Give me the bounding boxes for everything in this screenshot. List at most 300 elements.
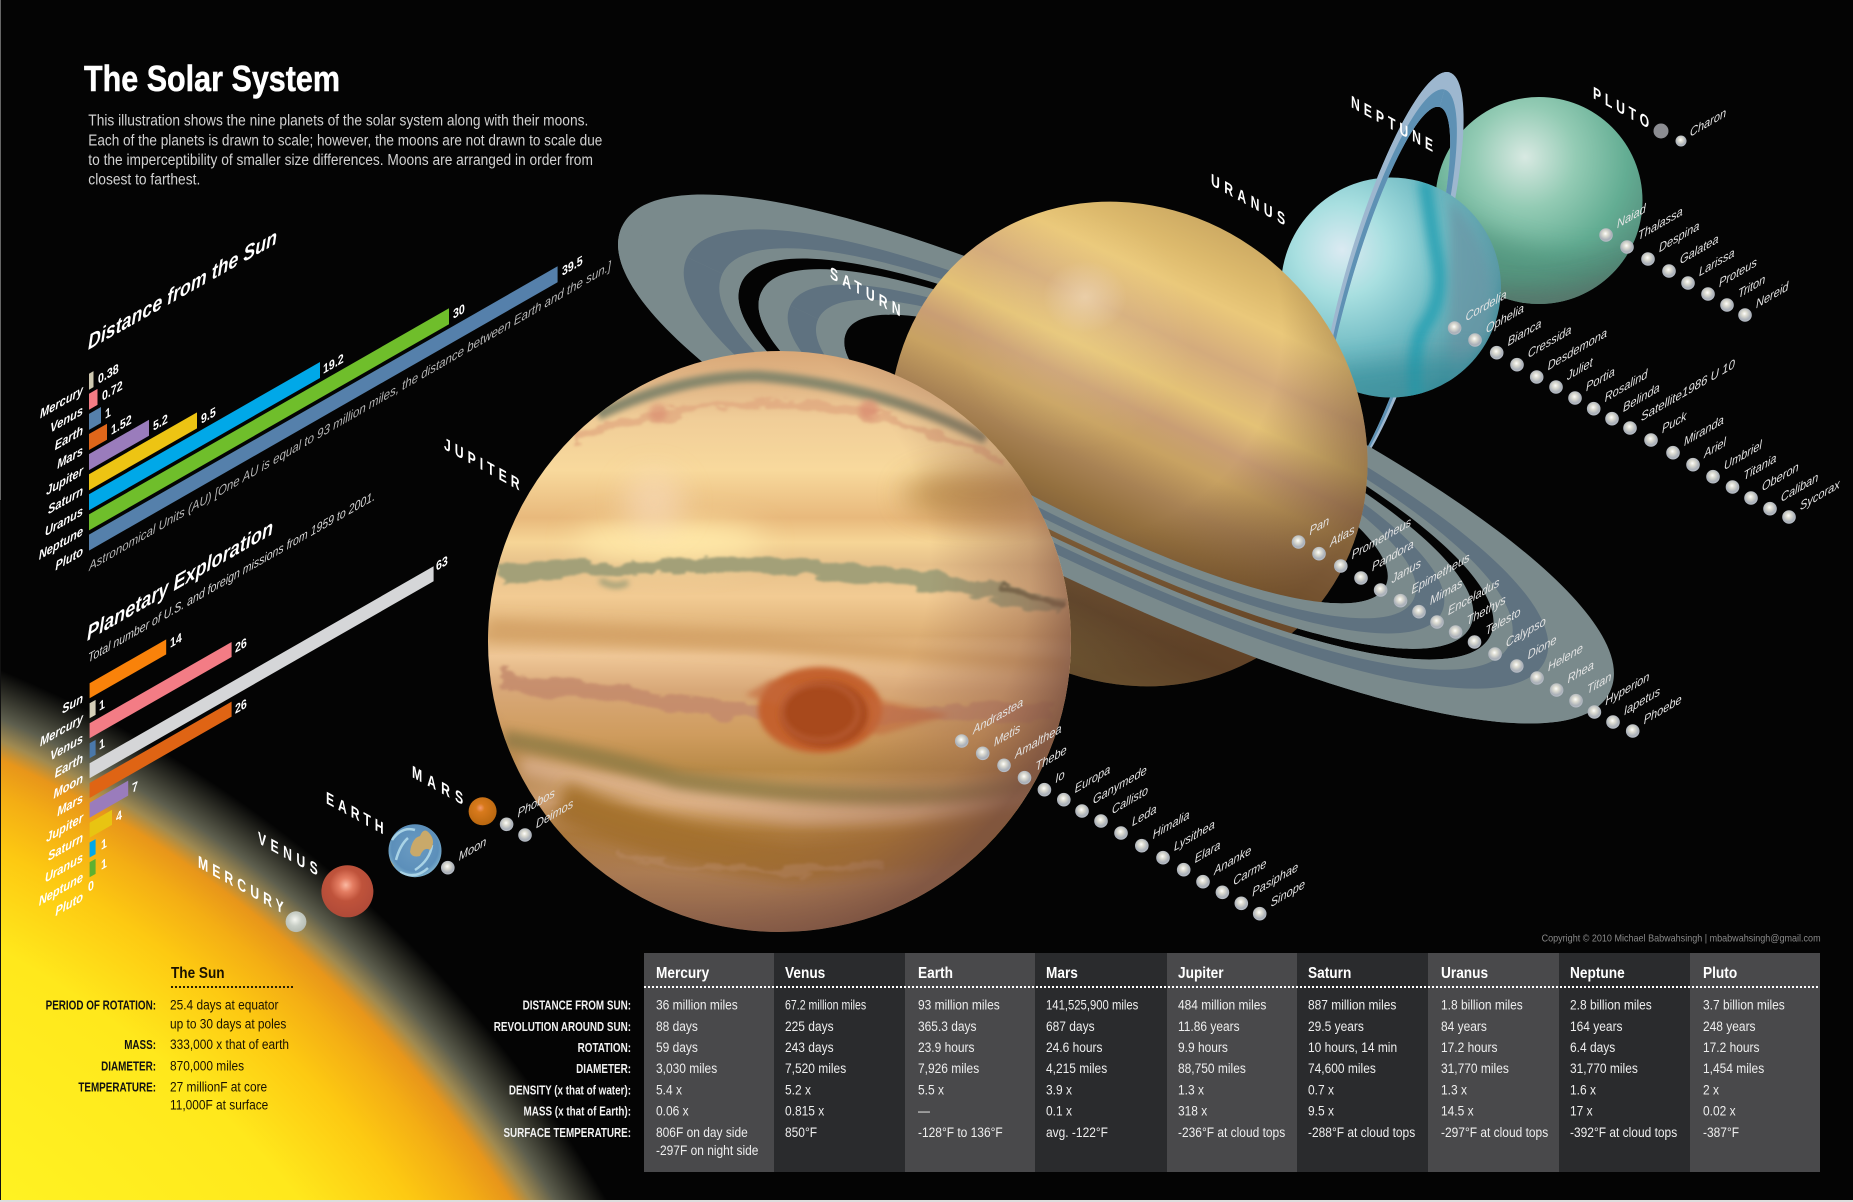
moon: Europa: Europa xyxy=(1075,762,1110,796)
table row labels: DIAMETER: xyxy=(576,1063,631,1076)
table column backgrounds xyxy=(644,953,1820,1172)
moon: Thebe: Thebe xyxy=(1036,742,1067,774)
distance values: 5.2 xyxy=(153,411,168,434)
exploration bars xyxy=(90,566,434,877)
planet: Saturn xyxy=(894,202,1368,686)
exploration values: 1 xyxy=(101,835,107,853)
Saturn rings: front xyxy=(618,226,1610,724)
panel: planet data table xyxy=(644,953,1820,1172)
distance labels: Jupiter xyxy=(46,462,84,499)
column: Saturn: 0.7 x xyxy=(1308,1082,1334,1098)
moon: Hyperion: Hyperion xyxy=(1605,669,1649,708)
exploration values: 0 xyxy=(88,877,94,895)
name: Mars: MARS xyxy=(412,763,463,809)
name: Pluto: PLUTO xyxy=(1593,84,1649,133)
distance labels xyxy=(39,381,84,583)
Saturn rings: back xyxy=(567,110,1665,808)
column: Neptune: Neptune xyxy=(1570,965,1625,982)
column: Mars xyxy=(1046,965,1139,1140)
column: Earth: 7,926 miles xyxy=(918,1060,980,1076)
moon: Hyperion xyxy=(1588,669,1649,719)
exploration values: 26 xyxy=(235,635,247,656)
AU note: Astronomical Units (AU) [One AU is equal to 93 million miles, the distance between Earth and the sun.] xyxy=(88,257,612,574)
column: Jupiter: 318 x xyxy=(1178,1103,1208,1119)
moon: Prometheus xyxy=(1334,514,1412,573)
column: Venus: 7,520 miles xyxy=(785,1060,847,1076)
moon: Despina xyxy=(1641,218,1699,266)
moon: Titania: Titania xyxy=(1744,451,1776,483)
moon: Phoebe xyxy=(1626,692,1682,738)
chart heading: distance: Distance from the Sun xyxy=(88,224,277,355)
Neptune ring xyxy=(1287,60,1493,500)
column: Venus: 5.2 x xyxy=(785,1082,811,1098)
moon: Elara xyxy=(1177,837,1220,876)
moon: Enceladus: Enceladus xyxy=(1448,575,1500,618)
moon: Rosalind xyxy=(1587,366,1648,416)
sun values: up to 30 days at poles xyxy=(170,1015,287,1032)
moons of Jupiter xyxy=(955,695,1305,920)
chart: planetary exploration xyxy=(39,488,448,929)
moon: Epimetheus xyxy=(1394,549,1470,608)
moon: Despina: Despina xyxy=(1659,218,1699,255)
moon: Titan xyxy=(1569,669,1611,708)
moon: Pasiphae: Pasiphae xyxy=(1252,859,1298,900)
moon: Galatea: Galatea xyxy=(1680,231,1719,267)
planet: Earth xyxy=(388,824,442,877)
moon: Umbriel: Umbriel xyxy=(1724,437,1763,473)
table row labels: DISTANCE FROM SUN: xyxy=(523,1000,631,1013)
moon of Pluto: Charon xyxy=(1676,105,1726,146)
exploration values: 26 xyxy=(235,696,247,717)
moon: Umbriel xyxy=(1706,437,1763,484)
distance values: 9.5 xyxy=(201,404,216,427)
moon: Oberon: Oberon xyxy=(1762,459,1799,494)
moon: Iapetus: Iapetus xyxy=(1624,683,1661,718)
column: Jupiter: 11.86 years xyxy=(1178,1018,1240,1034)
moon: Desdemona: Desdemona xyxy=(1548,325,1607,373)
column: Saturn: 29.5 years xyxy=(1308,1018,1364,1034)
moon: Juliet xyxy=(1549,355,1593,394)
column: Neptune: 164 years xyxy=(1570,1018,1623,1034)
moon: Epimetheus: Epimetheus xyxy=(1412,549,1470,597)
moon: Rhea xyxy=(1550,657,1594,697)
table row labels: SURFACE TEMPERATURE: xyxy=(503,1127,631,1140)
planet: Uranus xyxy=(1280,178,1501,410)
column: Mercury: -297F on night side xyxy=(656,1142,758,1158)
column: Saturn: -288°F at cloud tops xyxy=(1308,1124,1416,1140)
sun values: 27 millionF at core xyxy=(170,1079,267,1095)
moon: Telesto xyxy=(1468,604,1521,649)
column: Uranus xyxy=(1441,965,1549,1140)
moon: Ananke: Ananke xyxy=(1213,843,1251,879)
moon: Thalassa xyxy=(1620,204,1683,254)
moon: Atlas: Atlas xyxy=(1329,522,1355,551)
moon: Helene xyxy=(1530,640,1583,685)
sun heading: The Sun xyxy=(171,965,225,982)
column: Pluto: 0.02 x xyxy=(1703,1103,1736,1119)
moon: Pasiphae xyxy=(1234,859,1298,910)
moon: Thethys xyxy=(1449,592,1506,639)
column: Saturn: 9.5 x xyxy=(1308,1103,1334,1119)
moon: Dione xyxy=(1510,632,1557,673)
moon: Nereid xyxy=(1738,278,1789,322)
column: Mercury: 59 days xyxy=(656,1039,698,1055)
moon: Janus xyxy=(1374,555,1422,597)
moon: Bianca: Bianca xyxy=(1508,316,1541,349)
distance labels: Venus xyxy=(50,402,83,436)
moon: Helene: Helene xyxy=(1548,640,1583,674)
column: Neptune: -392°F at cloud tops xyxy=(1570,1124,1678,1140)
column: Uranus: 17.2 hours xyxy=(1441,1039,1498,1055)
moon: Metis xyxy=(976,720,1021,760)
column: Neptune: 2.8 billion miles xyxy=(1570,997,1652,1013)
sun values: 25.4 days at equator xyxy=(170,997,279,1013)
column: Pluto: 2 x xyxy=(1703,1082,1719,1098)
exploration labels xyxy=(39,689,84,929)
column: Uranus: Uranus xyxy=(1441,965,1488,982)
distance labels: Mercury xyxy=(40,381,84,422)
column: Venus: 850°F xyxy=(785,1124,817,1140)
intro text: to the imperceptibility of smaller size differences. Moons are arranged in order from xyxy=(88,152,593,169)
distance values: 0.38 xyxy=(98,361,119,387)
moon: Ophelia xyxy=(1468,301,1524,347)
moon: Naiad xyxy=(1599,201,1647,242)
column: Mars: 3.9 x xyxy=(1046,1082,1072,1098)
moon: Ophelia: Ophelia xyxy=(1486,301,1524,336)
sun values: 870,000 miles xyxy=(170,1057,245,1074)
column: Mars: 4,215 miles xyxy=(1046,1060,1108,1076)
distance bars xyxy=(89,266,558,551)
distance values: 39.5 xyxy=(562,253,583,279)
exploration values xyxy=(88,553,448,895)
exploration values: 63 xyxy=(436,553,448,574)
column: Mercury: 88 days xyxy=(656,1018,698,1034)
moon: Calypso xyxy=(1488,614,1546,661)
moon of Pluto: Charon: Charon xyxy=(1690,105,1726,140)
planet: Pluto globe (green) xyxy=(1436,97,1642,304)
distance values: 0.72 xyxy=(102,378,123,404)
Neptune ring: front limb over Uranus xyxy=(1331,72,1450,340)
column: Uranus: 14.5 x xyxy=(1441,1103,1474,1119)
column: Pluto: 248 years xyxy=(1703,1018,1756,1034)
moon: Pandora xyxy=(1354,537,1414,585)
column: Uranus: 31,770 miles xyxy=(1441,1060,1509,1076)
moon: Thalassa: Thalassa xyxy=(1638,204,1683,243)
column: Venus: 67.2 million miles xyxy=(785,997,867,1013)
column: Earth: 93 million miles xyxy=(918,997,1000,1013)
column: Earth: -128°F to 136°F xyxy=(918,1124,1003,1140)
column: Neptune: 31,770 miles xyxy=(1570,1060,1638,1076)
column: Uranus: 84 years xyxy=(1441,1018,1487,1034)
column: Mars: 0.1 x xyxy=(1046,1103,1072,1119)
planet names xyxy=(198,84,1649,919)
moon: Mimas xyxy=(1412,575,1463,618)
moon: Deimos: Deimos xyxy=(536,796,574,831)
moon: Europa xyxy=(1057,762,1110,806)
sun row labels xyxy=(46,1000,156,1095)
moon: Dione: Dione xyxy=(1528,632,1557,662)
moon: Larissa: Larissa xyxy=(1699,245,1734,279)
column: Saturn: 10 hours, 14 min xyxy=(1308,1039,1397,1055)
moon: Atlas xyxy=(1312,522,1355,560)
column: Saturn xyxy=(1308,965,1416,1140)
exploration values: 1 xyxy=(101,855,107,873)
exploration labels: Saturn xyxy=(48,829,83,864)
table row labels: MASS (x that of Earth): xyxy=(524,1106,631,1119)
moon: Thethys: Thethys xyxy=(1467,592,1506,628)
moon: Miranda xyxy=(1666,412,1724,460)
exploration values: 14 xyxy=(170,630,182,651)
moon: Phoebe: Phoebe xyxy=(1644,692,1682,727)
name: Uranus: URANUS xyxy=(1211,171,1285,230)
sun row labels: TEMPERATURE: xyxy=(78,1082,156,1095)
planet: Venus xyxy=(321,865,373,917)
moon: Rhea: Rhea xyxy=(1568,657,1594,686)
column: Earth: 5.5 x xyxy=(918,1082,944,1098)
moon: Elara: Elara xyxy=(1195,837,1220,866)
table row labels: ROTATION: xyxy=(578,1042,631,1055)
intro text: Each of the planets is drawn to scale; however, the moons are not drawn to scale due xyxy=(88,132,602,149)
moon: Nereid: Nereid xyxy=(1756,278,1789,311)
moon: Himalia xyxy=(1135,807,1189,852)
column: Pluto: 1,454 miles xyxy=(1703,1060,1765,1076)
moon: Lysithea: Lysithea xyxy=(1174,817,1215,854)
column: Pluto: Pluto xyxy=(1703,965,1737,982)
column: Neptune: 17 x xyxy=(1570,1103,1593,1119)
moon: Proteus: Proteus xyxy=(1719,254,1758,290)
moon: Sinope: Sinope xyxy=(1271,877,1305,910)
exploration values: 4 xyxy=(116,807,122,825)
name: Neptune: NEPTUNE xyxy=(1351,93,1433,156)
moon: Sinope xyxy=(1253,877,1305,920)
moon: Puck xyxy=(1644,408,1687,447)
moon: Titania xyxy=(1726,451,1776,494)
distance values: 1.52 xyxy=(111,412,132,438)
moon: Oberon xyxy=(1744,459,1799,505)
column: Venus: 0.815 x xyxy=(785,1103,825,1119)
moon: Calypso: Calypso xyxy=(1506,614,1546,650)
exploration values: 7 xyxy=(132,778,138,796)
moon: Telesto: Telesto xyxy=(1486,604,1521,638)
moon: Leda xyxy=(1114,801,1156,840)
moon: Desdemona xyxy=(1530,325,1607,384)
column: Neptune: 1.6 x xyxy=(1570,1082,1596,1098)
distance labels: Saturn xyxy=(48,482,83,518)
moon: Titan: Titan xyxy=(1587,669,1611,697)
moon: Metis: Metis xyxy=(994,720,1021,750)
column: Mercury: 806F on day side xyxy=(656,1124,748,1140)
moon: Iapetus xyxy=(1606,683,1661,729)
moon: Andrastea xyxy=(955,695,1023,748)
exploration values: 1 xyxy=(99,735,105,753)
moons of Saturn xyxy=(1292,513,1682,738)
exploration labels: Sun xyxy=(62,690,83,717)
moon: Pan: Pan xyxy=(1310,513,1329,538)
moon: Caliban: Caliban xyxy=(1781,470,1818,505)
table row labels: DENSITY (x that of water): xyxy=(509,1085,631,1098)
column: Jupiter xyxy=(1178,965,1286,1140)
moon: Thebe xyxy=(1018,742,1067,784)
column: Pluto: 17.2 hours xyxy=(1703,1039,1760,1055)
intro text: closest to farthest. xyxy=(88,171,200,188)
moon: Belinda xyxy=(1605,380,1660,426)
column: Earth: 23.9 hours xyxy=(918,1039,975,1055)
distance labels: Mars xyxy=(57,442,83,472)
distance labels: Earth xyxy=(55,422,83,453)
moon: Larissa xyxy=(1681,245,1734,290)
planet: Mercury xyxy=(286,911,306,932)
table header divider xyxy=(644,986,1820,988)
column: Pluto xyxy=(1703,965,1785,1140)
moons of Neptune xyxy=(1599,201,1789,322)
column: Jupiter: 9.9 hours xyxy=(1178,1039,1228,1055)
title: The Solar System xyxy=(84,58,340,99)
moon: Mimas: Mimas xyxy=(1430,575,1463,608)
exploration labels: Pluto xyxy=(55,888,83,919)
column: Earth: Earth xyxy=(918,965,953,982)
distance values: 30 xyxy=(453,301,465,322)
moon: Rosalind: Rosalind xyxy=(1605,366,1648,405)
moon: Phobos: Phobos xyxy=(518,785,555,821)
moon: Carme xyxy=(1216,856,1266,899)
moon: Satellite 1986 U 10: Satellite1986 U 10 xyxy=(1641,355,1736,424)
column: Jupiter: -236°F at cloud tops xyxy=(1178,1124,1286,1140)
column: Mars: Mars xyxy=(1046,965,1078,982)
column: Uranus: -297°F at cloud tops xyxy=(1441,1124,1549,1140)
moon: Galatea xyxy=(1662,231,1719,278)
column: Mercury: 3,030 miles xyxy=(656,1060,718,1076)
column: Neptune: 6.4 days xyxy=(1570,1039,1616,1055)
exploration labels: Earth xyxy=(55,750,83,781)
planet: Pluto dwarf xyxy=(1654,124,1668,138)
column: Jupiter: Jupiter xyxy=(1178,965,1224,982)
column: Mars: 687 days xyxy=(1046,1018,1095,1034)
column: Earth: 365.3 days xyxy=(918,1018,977,1034)
column: Earth xyxy=(918,965,1003,1140)
column: Uranus: 1.3 x xyxy=(1441,1082,1467,1098)
column: Mercury: 0.06 x xyxy=(656,1103,689,1119)
column: Mars: avg. -122°F xyxy=(1046,1124,1108,1140)
moon: Callisto: Callisto xyxy=(1112,783,1148,817)
exploration labels: Uranus xyxy=(45,849,83,886)
moon: Belinda: Belinda xyxy=(1623,380,1660,415)
moon: Portia: Portia xyxy=(1586,364,1615,394)
table row labels xyxy=(494,1000,631,1140)
planet: Mars xyxy=(469,797,497,825)
moon: Leda: Leda xyxy=(1132,801,1156,829)
planet: Jupiter xyxy=(488,351,1071,932)
exploration labels: Moon xyxy=(54,770,83,802)
panel: the sun facts xyxy=(46,965,294,1113)
moon: Ananke xyxy=(1196,843,1251,888)
exploration values: 1 xyxy=(99,696,105,714)
column: Venus: Venus xyxy=(785,965,825,982)
distance values xyxy=(98,253,583,438)
moon: Janus: Janus xyxy=(1391,555,1422,587)
moon: Pan xyxy=(1292,513,1329,549)
column: Jupiter: 88,750 miles xyxy=(1178,1060,1246,1076)
moon: Triton xyxy=(1720,272,1765,312)
moon: Ganymede: Ganymede xyxy=(1093,763,1147,807)
moon: Juliet: Juliet xyxy=(1566,355,1593,384)
moon: Amalthea xyxy=(997,721,1061,772)
moon: Cressida: Cressida xyxy=(1528,322,1571,361)
name: Mercury: MERCURY xyxy=(198,853,284,919)
distance labels: Uranus xyxy=(45,502,83,539)
column: Saturn: Saturn xyxy=(1308,965,1351,982)
moon: Cordelia xyxy=(1448,287,1507,335)
distance labels: Neptune xyxy=(39,523,83,563)
column: Pluto: 3.7 billion miles xyxy=(1703,997,1785,1013)
chart: distance from the sun xyxy=(39,224,612,583)
name: Earth: EARTH xyxy=(326,789,384,839)
moon: Himalia: Himalia xyxy=(1153,807,1189,842)
intro text: This illustration shows the nine planets of the solar system along with their moons. xyxy=(88,112,588,129)
exploration labels: Jupiter xyxy=(46,809,84,846)
moon: Moon: Moon xyxy=(459,834,486,864)
moons of Uranus xyxy=(1448,287,1840,524)
column: Venus: 243 days xyxy=(785,1039,834,1055)
column: Uranus: 1.8 billion miles xyxy=(1441,997,1523,1013)
column: Jupiter: 1.3 x xyxy=(1178,1082,1204,1098)
column: Mercury: 5.4 x xyxy=(656,1082,682,1098)
sun divider xyxy=(171,986,294,988)
moon: Portia xyxy=(1568,364,1615,405)
moon: Ariel xyxy=(1686,434,1727,472)
moon: Caliban xyxy=(1763,470,1818,516)
moon: Enceladus xyxy=(1430,575,1500,629)
moon: Pandora: Pandora xyxy=(1372,537,1414,574)
column: Mercury: Mercury xyxy=(656,965,710,982)
moon: Triton: Triton xyxy=(1738,272,1765,301)
moons of Earth and Mars xyxy=(441,785,574,874)
table row labels: REVOLUTION AROUND SUN: xyxy=(494,1021,631,1034)
intro text xyxy=(88,112,602,188)
column: Venus: 225 days xyxy=(785,1018,834,1034)
moon: Miranda: Miranda xyxy=(1684,412,1724,449)
moon: Io: Io xyxy=(1055,767,1065,786)
moon: Ganymede xyxy=(1075,763,1147,818)
sun values xyxy=(170,997,289,1113)
moon: Proteus xyxy=(1701,254,1758,301)
column: Mercury xyxy=(656,965,758,1158)
column: Mars: 141,525,900 miles xyxy=(1046,997,1139,1013)
moon: Lysithea xyxy=(1156,817,1215,864)
exploration subtitle: Total number of U.S. and foreign missions from 1959 to 2001. xyxy=(88,488,375,665)
name: Venus: VENUS xyxy=(258,829,318,880)
column: Venus xyxy=(785,965,867,1140)
name: Saturn: SATURN xyxy=(830,264,901,321)
sun row labels: PERIOD OF ROTATION: xyxy=(46,1000,156,1013)
moon: Sycorax: Sycorax xyxy=(1800,476,1840,513)
moon: Naiad: Naiad xyxy=(1617,201,1647,231)
moon: Puck: Puck xyxy=(1662,408,1687,436)
sun values: 11,000F at surface xyxy=(170,1097,268,1113)
name: Jupiter: JUPITER xyxy=(444,435,520,495)
moon: Bianca xyxy=(1490,316,1541,360)
column: Saturn: 74,600 miles xyxy=(1308,1060,1376,1076)
distance values: 19.2 xyxy=(323,351,344,377)
sun values: 333,000 x that of earth xyxy=(170,1036,289,1052)
sun row labels: DIAMETER: xyxy=(101,1060,156,1074)
moon: Andrastea: Andrastea xyxy=(972,695,1023,738)
moon: Callisto xyxy=(1094,783,1148,828)
distance labels: Pluto xyxy=(55,543,83,574)
moon: Ariel: Ariel xyxy=(1703,434,1727,462)
moon: Io xyxy=(1038,767,1065,796)
moon: Carme: Carme xyxy=(1233,856,1266,889)
column: Pluto: -387°F xyxy=(1703,1124,1739,1140)
